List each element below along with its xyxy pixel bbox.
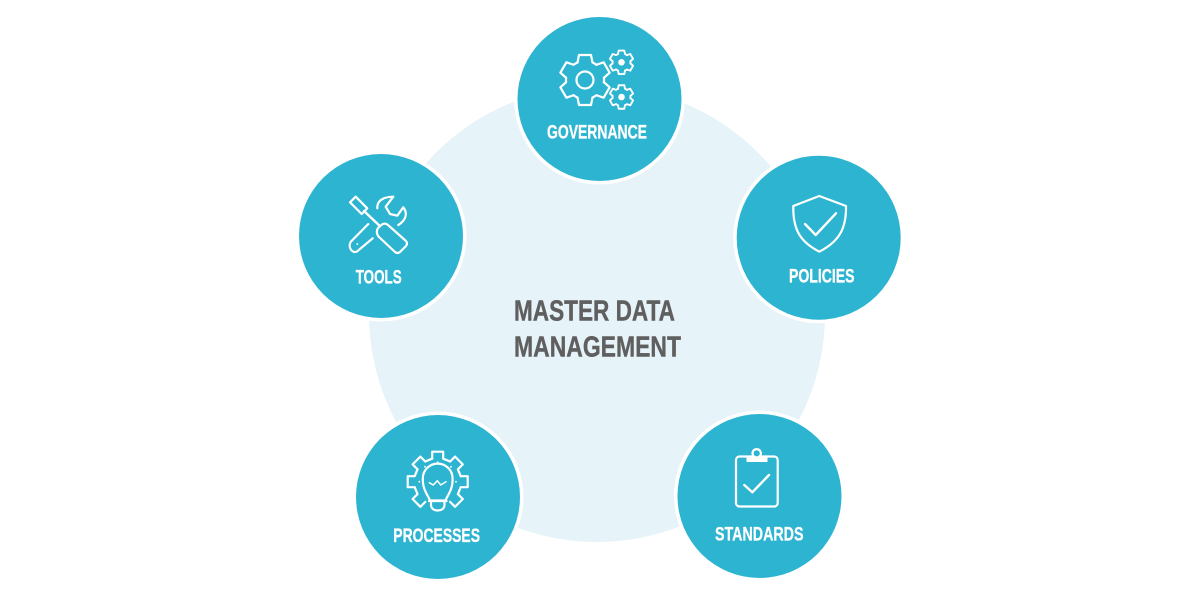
center title: MANAGEMENT [514,332,681,364]
panel: governance [518,17,682,181]
label: processes: PROCESSES [393,525,480,547]
icon: clipboard with check [736,449,778,506]
icon: screwdriver and wrench [350,197,407,253]
icon: shield with check [793,196,846,252]
icon: gear with light bulb [408,452,468,510]
panel: policies [737,156,901,320]
central background circle [369,86,825,542]
icon: gears [558,51,634,109]
panel: standards [678,414,842,578]
label: governance: GOVERNANCE [547,122,647,144]
label: tools: TOOLS [356,266,402,288]
label: policies: POLICIES [789,266,854,288]
center title [514,296,681,364]
panel: processes [356,415,520,579]
center title: MASTER DATA [514,296,675,328]
label: standards: STANDARDS [715,524,804,546]
panel: tools [299,154,463,318]
